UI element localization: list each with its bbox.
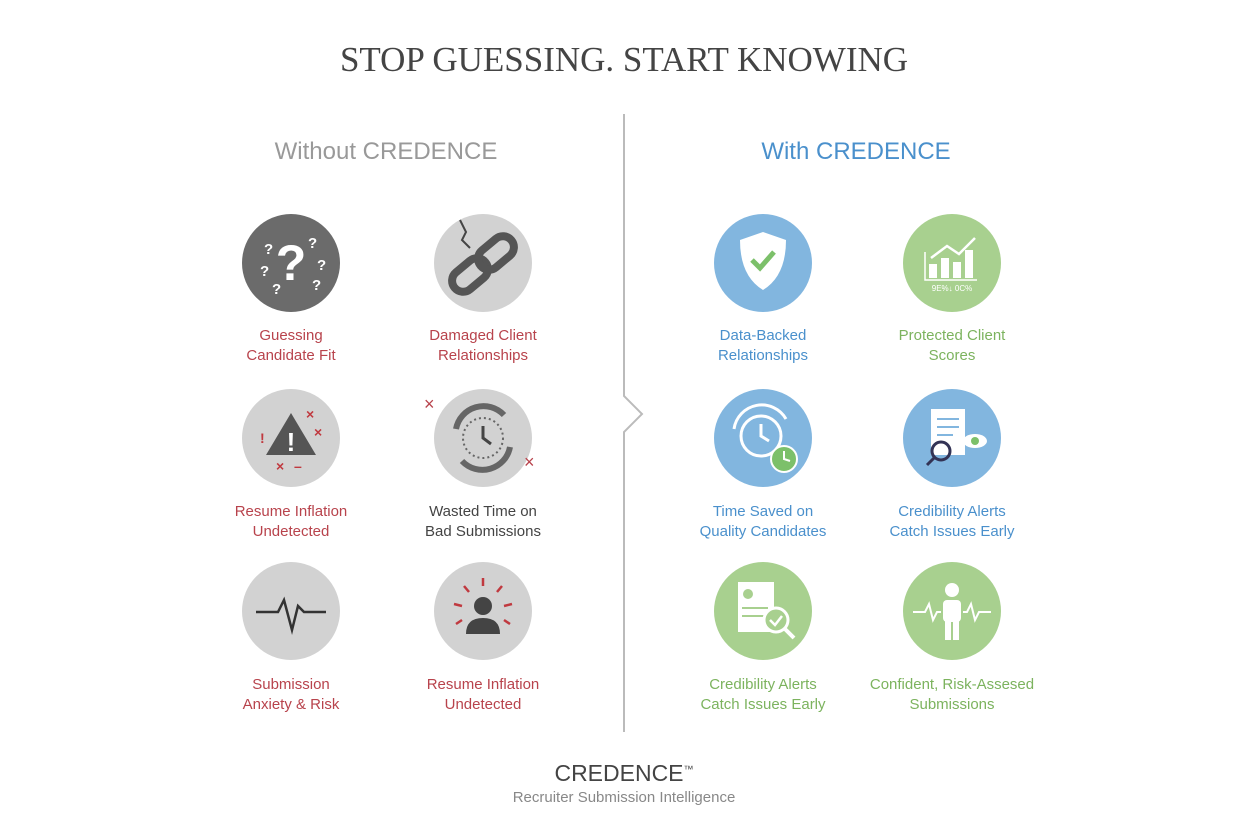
icon: heartbeat [242, 562, 340, 660]
label: credibility alerts [889, 503, 1015, 540]
label: resume inflation: Undetected [253, 523, 329, 540]
icon: question marks: ? [312, 277, 321, 294]
label: resume inflation 2 [427, 676, 539, 713]
label: guessing: Guessing [259, 327, 323, 344]
label: protected: Scores [929, 347, 975, 364]
icon: broken chain [434, 214, 532, 312]
label: data-backed: Relationships [718, 347, 808, 364]
footer brand: CREDENCE™ [554, 760, 694, 786]
icon: warning: × [314, 424, 322, 440]
icon: clock [714, 389, 812, 487]
icon: question marks: ? [264, 241, 273, 258]
label: credibility alerts 2: Credibility Alerts [709, 676, 817, 693]
label: damaged: Damaged Client [429, 327, 537, 344]
icon: question marks: ? [272, 281, 281, 298]
heading: with: With CREDENCE [761, 138, 951, 165]
label: resume inflation [235, 503, 347, 540]
icon: person heartbeat [903, 562, 1001, 660]
label: confident [870, 676, 1034, 713]
icon: question marks: ? [308, 235, 317, 252]
label: time saved: Quality Candidates [700, 523, 826, 540]
label: wasted time: Wasted Time on [429, 503, 537, 520]
icon: warning: ! [260, 430, 265, 446]
label: credibility alerts 2 [700, 676, 826, 713]
icon: warning: ! [287, 427, 295, 457]
label: time saved: Time Saved on [713, 503, 813, 520]
icon: warning [242, 389, 340, 487]
icon: warning: × [306, 406, 314, 422]
icon: question marks: ? [317, 257, 326, 274]
label: anxiety [242, 676, 340, 713]
icon: question marks: ? [260, 263, 269, 280]
icon: chart: 9E%↓ 0C% [932, 284, 972, 293]
label: data-backed: Data-Backed [720, 327, 806, 344]
icon: warning: × [276, 458, 284, 474]
label: protected: Protected Client [899, 327, 1005, 344]
label: protected [899, 327, 1006, 364]
footer tagline: Recruiter Submission Intelligence [513, 789, 735, 806]
label: wasted time [425, 503, 541, 540]
icon: shield [714, 214, 812, 312]
label: anxiety: Anxiety & Risk [243, 696, 339, 713]
label: wasted time: Bad Submissions [425, 523, 541, 540]
icon: document eye [903, 389, 1001, 487]
label: resume inflation 2: Resume Inflation [427, 676, 539, 693]
icon: warning: – [294, 458, 302, 474]
label: credibility alerts: Credibility Alerts [898, 503, 1006, 520]
label: credibility alerts: Catch Issues Early [889, 523, 1015, 540]
icon: question marks: ? [276, 235, 306, 291]
icon: clock arrows [434, 389, 532, 487]
label: damaged [429, 327, 537, 364]
label: guessing [246, 327, 336, 364]
label: resume inflation: Resume Inflation [235, 503, 347, 520]
label: confident: Confident, Risk-Assesed [870, 676, 1034, 693]
title: STOP GUESSING. START KNOWING [340, 40, 908, 79]
label: damaged: Relationships [438, 347, 528, 364]
heading: without: Without CREDENCE [275, 138, 497, 165]
label: guessing: Candidate Fit [246, 347, 336, 364]
icon: question marks [242, 214, 340, 312]
label: time saved [700, 503, 826, 540]
label: resume inflation 2: Undetected [445, 696, 521, 713]
label: anxiety: Submission [252, 676, 330, 693]
label: data-backed [718, 327, 808, 364]
icon: chart [903, 214, 1001, 312]
icon: resume search [714, 562, 812, 660]
label: confident: Submissions [909, 696, 995, 713]
icon: red x marks: × [424, 394, 435, 414]
divider with chevron [623, 114, 644, 732]
label: credibility alerts 2: Catch Issues Early [700, 696, 826, 713]
text: × [524, 452, 535, 472]
icon: person alert [434, 562, 532, 660]
